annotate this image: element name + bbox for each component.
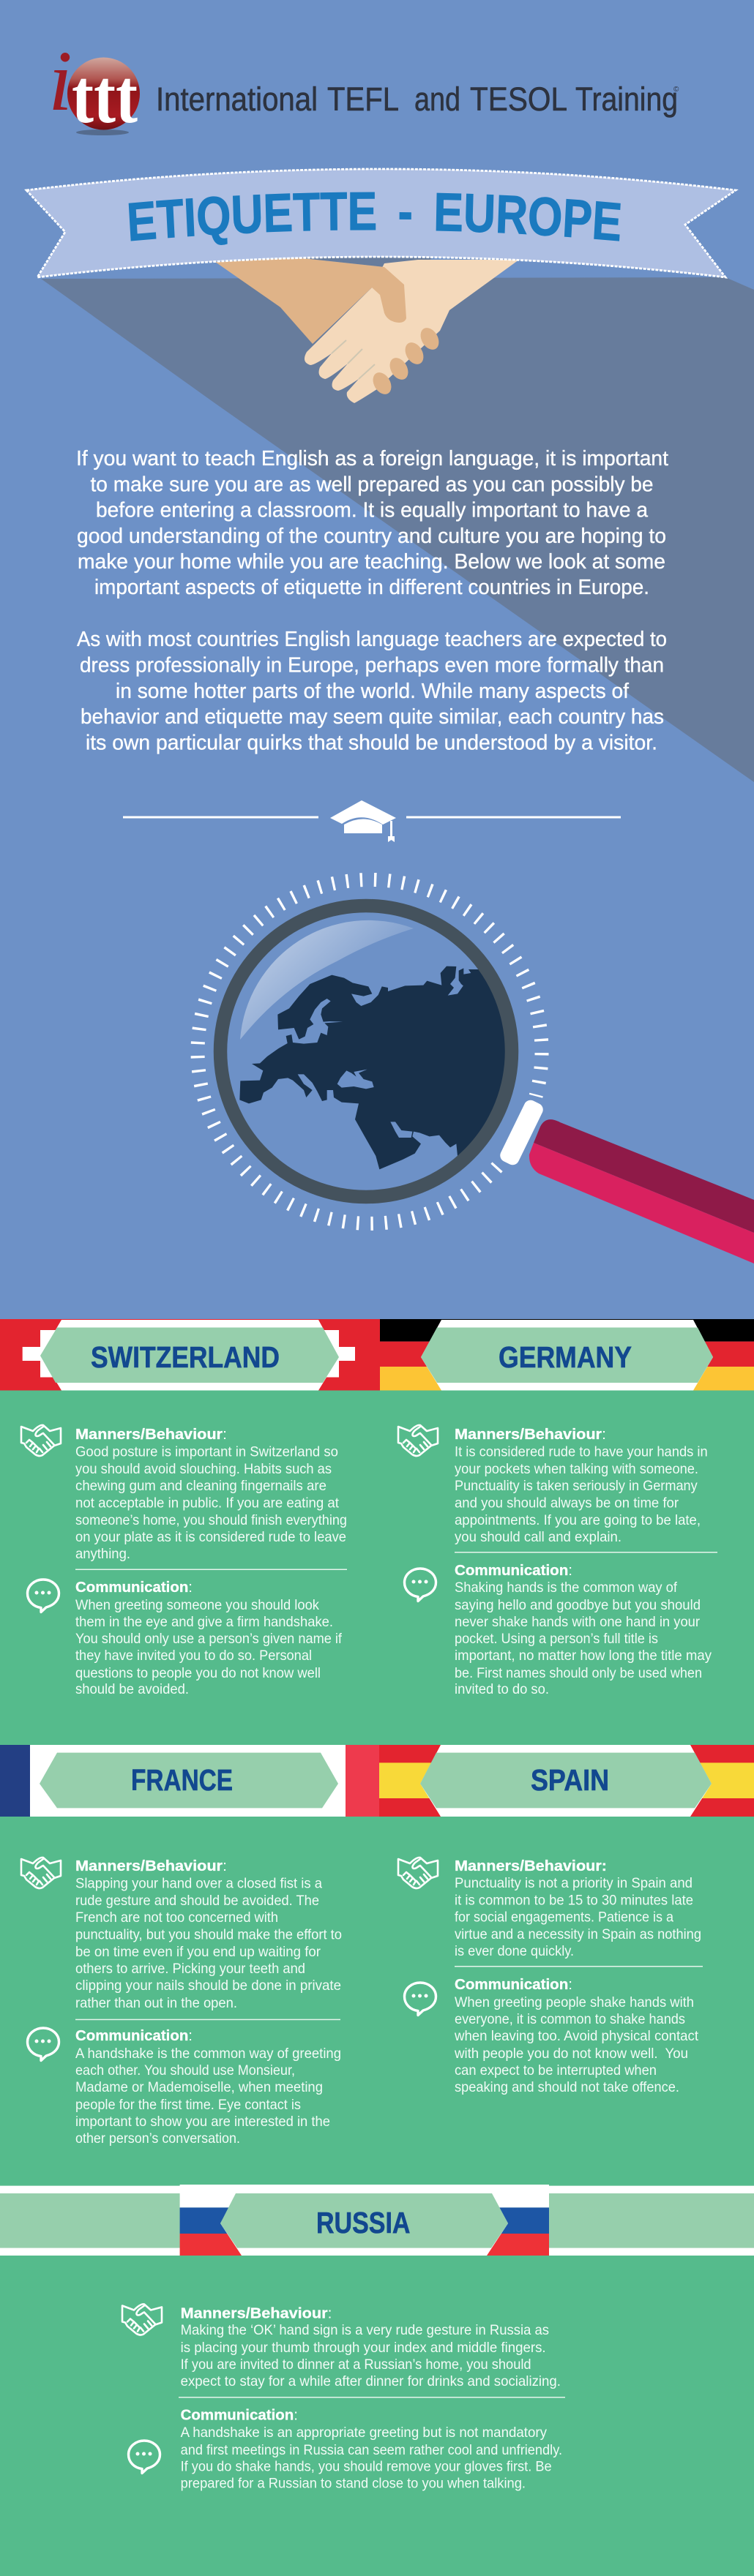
text: Russia manners: [181, 2306, 561, 2389]
icon: speech bubble Germany: [404, 1569, 436, 1601]
text: Spain communication: when leaving too. Avoid physical contact: [454, 2028, 699, 2044]
text: Switzerland manners: you should avoid slouching. Habits such as: [75, 1461, 332, 1477]
intro paragraph 2: As with most countries English language teachers are expected to: [77, 628, 667, 651]
text: Russia communication: If you do shake hands, you should remove your gloves first. Be: [181, 2458, 552, 2474]
icon: speech bubble Spain: [404, 1983, 436, 2015]
logo wordmark: ©: [673, 86, 679, 94]
text: Russia communication: [181, 2407, 562, 2492]
intro paragraph 2: [77, 628, 667, 755]
text: France manners: Manners/Behaviour :: [75, 1858, 227, 1874]
collar: [498, 1098, 545, 1167]
text: Switzerland communication: them in the eye and give a firm handshake.: [75, 1614, 333, 1630]
text: Germany manners: Manners/Behaviour :: [455, 1427, 606, 1443]
text: Russia communication: prepared for a Russian to stand close to you when talking.: [181, 2476, 526, 2492]
text: Germany communication: Communication:: [455, 1563, 572, 1579]
logo wordmark: and: [414, 80, 460, 118]
logo wordmark: International: [156, 80, 318, 118]
icon: speech bubble France: [28, 2028, 59, 2060]
text: Spain communication: When greeting people shake hands with: [455, 1994, 694, 2010]
logo wordmark: Training: [575, 80, 678, 118]
handshake illustration: [215, 258, 519, 403]
text: France communication: important to show you are interested in the: [75, 2114, 330, 2130]
text: Spain communication: with people you do not know well. You: [454, 2046, 688, 2062]
lens glare: [240, 920, 414, 1040]
text: France communication: other person’s conversation.: [75, 2130, 240, 2147]
icon: speech bubble Switzerland: [28, 1580, 59, 1612]
text: Switzerland communication: Communication:: [75, 1580, 193, 1596]
heading: Spain: SPAIN: [531, 1763, 609, 1797]
text: France communication: A handshake is the common way of greeting: [75, 2046, 341, 2062]
title ribbon: [0, 169, 736, 277]
intro paragraph 2: in some hotter parts of the world. While many aspects of: [116, 680, 630, 703]
panel: green background: [0, 1390, 754, 2576]
text: Germany communication: important, no matter how long the title may: [455, 1648, 712, 1664]
text: Germany communication: Shaking hands is the common way of: [455, 1580, 678, 1596]
text: Switzerland manners: Manners/Behaviour :: [75, 1427, 227, 1443]
text: France manners: others to arrive. Picking your teeth and: [75, 1961, 305, 1977]
text: Russia manners: Manners/Behaviour :: [181, 2306, 332, 2322]
text: Spain manners: Manners/Behaviour:: [455, 1858, 607, 1874]
text: Spain communication: everyone, it is common to shake hands: [455, 2011, 685, 2027]
text: Switzerland manners: chewing gum and cleaning fingernails are: [75, 1478, 326, 1494]
text: Spain communication: can expect to be interrupted when: [455, 2062, 657, 2079]
text: Switzerland manners: Good posture is important in Switzerland so: [75, 1444, 338, 1460]
text: France communication: Madame or Mademoiselle, when meeting: [75, 2079, 323, 2095]
heading: Switzerland: SWITZERLAND: [91, 1340, 280, 1374]
heading: France: FRANCE: [131, 1763, 233, 1797]
banner: Spain flag: [379, 1745, 754, 1817]
text: France communication: people for the first time. Eye contact is: [75, 2097, 301, 2113]
icon: handshake France: [21, 1858, 61, 1888]
logo: [48, 33, 140, 139]
logo: ttt: [72, 53, 138, 139]
text: Russia manners: Making the ‘OK’ hand sign is a very rude gesture in Russia as: [181, 2322, 549, 2338]
text: France manners: rather than out in the open.: [75, 1995, 237, 2011]
text: France communication: [75, 2028, 341, 2147]
magnifying glass with map of Europe: [198, 879, 754, 1263]
text: Germany manners: It is considered rude to have your hands in: [455, 1444, 708, 1460]
handle: [534, 1119, 754, 1233]
text: Germany communication: be. First names should only be used when: [455, 1665, 702, 1681]
text: Russia communication: Communication:: [181, 2407, 298, 2423]
intro paragraph 2: behavior and etiquette may seem quite similar, each country has: [81, 705, 664, 729]
text: Germany manners: Punctuality is taken seriously in Germany: [455, 1478, 698, 1494]
text: Germany manners: and you should always be on time for: [455, 1495, 679, 1512]
text: Germany communication: saying hello and goodbye but you should: [455, 1597, 701, 1613]
banner: Switzerland flag: [0, 1319, 380, 1390]
text: Spain manners: it is common to be 15 to 30 minutes late: [455, 1892, 693, 1908]
lens rim: [220, 906, 512, 1197]
text: Switzerland communication: When greeting someone you should look: [75, 1597, 319, 1613]
text: Switzerland communication: questions to people you do not know well: [75, 1665, 321, 1681]
text: Spain communication: Communication:: [455, 1977, 572, 1993]
icon: speech bubble Russia: [129, 2441, 160, 2473]
logo wordmark: TESOL: [470, 80, 567, 118]
heading: Russia: RUSSIA: [316, 2206, 410, 2239]
text: Switzerland manners: on your plate as it is considered rude to leave: [75, 1529, 346, 1545]
banner long shadow: [41, 277, 754, 782]
text: Switzerland manners: not acceptable in public. If you are eating at: [75, 1495, 340, 1512]
text: Switzerland manners: anything.: [75, 1546, 130, 1562]
intro paragraph 1: to make sure you are as well prepared as you can possibly be: [91, 473, 653, 496]
heading: Germany: GERMANY: [499, 1340, 632, 1374]
text: Switzerland manners: someone’s home, you should finish everything: [75, 1512, 347, 1528]
intro paragraph 1: important aspects of etiquette in different countries in Europe.: [94, 576, 649, 599]
text: Russia manners: expect to stay for a while after dinner for drinks and socializing.: [181, 2373, 561, 2389]
text: France manners: be on time even if you end up waiting for: [75, 1944, 321, 1960]
intro paragraph 1: make your home while you are teaching. Below we look at some: [78, 550, 665, 574]
text: France manners: rude gesture and should be avoided. The: [75, 1893, 319, 1909]
text: Spain communication: speaking and should not take offence.: [455, 2079, 679, 2095]
intro paragraph 1: [76, 447, 668, 599]
text: Russia communication: A handshake is an appropriate greeting but is not mandatory: [181, 2425, 547, 2441]
text: France manners: punctuality, but you should make the effort to: [75, 1927, 342, 1943]
tick ring: [198, 879, 542, 1223]
text: France communication: each other. You should use Monsieur,: [75, 2062, 295, 2079]
intro paragraph 1: If you want to teach English as a foreign language, it is important: [76, 447, 668, 470]
text: Spain manners: is ever done quickly.: [455, 1943, 574, 1959]
intro paragraph 2: its own particular quirks that should be understood by a visitor.: [86, 732, 657, 755]
text: Germany manners: you should call and explain.: [455, 1529, 622, 1545]
text: Switzerland communication: should be avoided.: [75, 1681, 189, 1697]
text: Switzerland communication: [75, 1580, 343, 1697]
intro paragraph 1: before entering a classroom. It is equally important to have a: [96, 499, 649, 522]
text: France manners: [75, 1858, 342, 2011]
icon: graduation cap with divider lines: [123, 800, 621, 842]
text: Spain manners: [455, 1858, 701, 1959]
text: Spain manners: virtue and a necessity in Spain as nothing: [455, 1926, 701, 1942]
text: Germany manners: your pockets when talking with someone.: [455, 1461, 698, 1477]
icon: handshake Russia: [122, 2304, 162, 2335]
text: Spain manners: Punctuality is not a priority in Spain and: [455, 1875, 693, 1891]
text: Russia communication: and first meetings in Russia can seem rather cool and unfriendly.: [181, 2442, 562, 2458]
panel: blue background: [0, 0, 754, 1319]
title: ETIQUETTE - EUROPE: [129, 192, 621, 245]
intro paragraph 1: good understanding of the country and culture you are hoping to: [77, 525, 666, 548]
text: Germany communication: never shake hands with one hand in your: [455, 1614, 700, 1630]
logo wordmark: TEFL: [327, 80, 399, 118]
text: Germany manners: appointments. If you are going to be late,: [455, 1512, 701, 1528]
text: Spain communication: [454, 1977, 699, 2095]
text: France manners: Slapping your hand over a closed fist is a: [75, 1876, 322, 1892]
intro paragraph 2: dress professionally in Europe, perhaps even more formally than: [80, 654, 664, 677]
text: Russia manners: If you are invited to dinner at a Russian’s home, you should: [181, 2357, 531, 2373]
text: Russia manners: is placing your thumb through your index and middle fingers.: [181, 2340, 546, 2356]
map of Europe and Asia: [239, 966, 505, 1169]
banner: France flag: [0, 1745, 380, 1817]
text: Germany communication: invited to do so.: [455, 1681, 549, 1697]
text: France communication: Communication:: [75, 2028, 193, 2044]
text: France manners: French are not too concerned with: [75, 1910, 278, 1926]
logo wordmark: [156, 80, 679, 118]
text: Switzerland communication: they have invited you to do so. Personal: [75, 1648, 312, 1664]
logo: i: [48, 33, 72, 129]
text: Spain manners: for social engagements. Patience is a: [455, 1910, 673, 1926]
banner: Russia flag: [0, 2185, 754, 2256]
text: Germany communication: [455, 1563, 712, 1697]
banner: Germany flag: [380, 1319, 754, 1390]
text: France manners: clipping your nails should be done in private: [75, 1978, 341, 1994]
icon: handshake Germany: [398, 1425, 438, 1456]
icon: handshake Switzerland: [21, 1425, 61, 1456]
text: Germany manners: [455, 1427, 708, 1545]
icon: handshake Spain: [398, 1858, 438, 1888]
text: Switzerland communication: You should only use a person’s given name if: [75, 1631, 343, 1647]
text: Switzerland manners: [75, 1427, 347, 1562]
text: Germany communication: pocket. Using a person’s full title is: [455, 1631, 658, 1647]
